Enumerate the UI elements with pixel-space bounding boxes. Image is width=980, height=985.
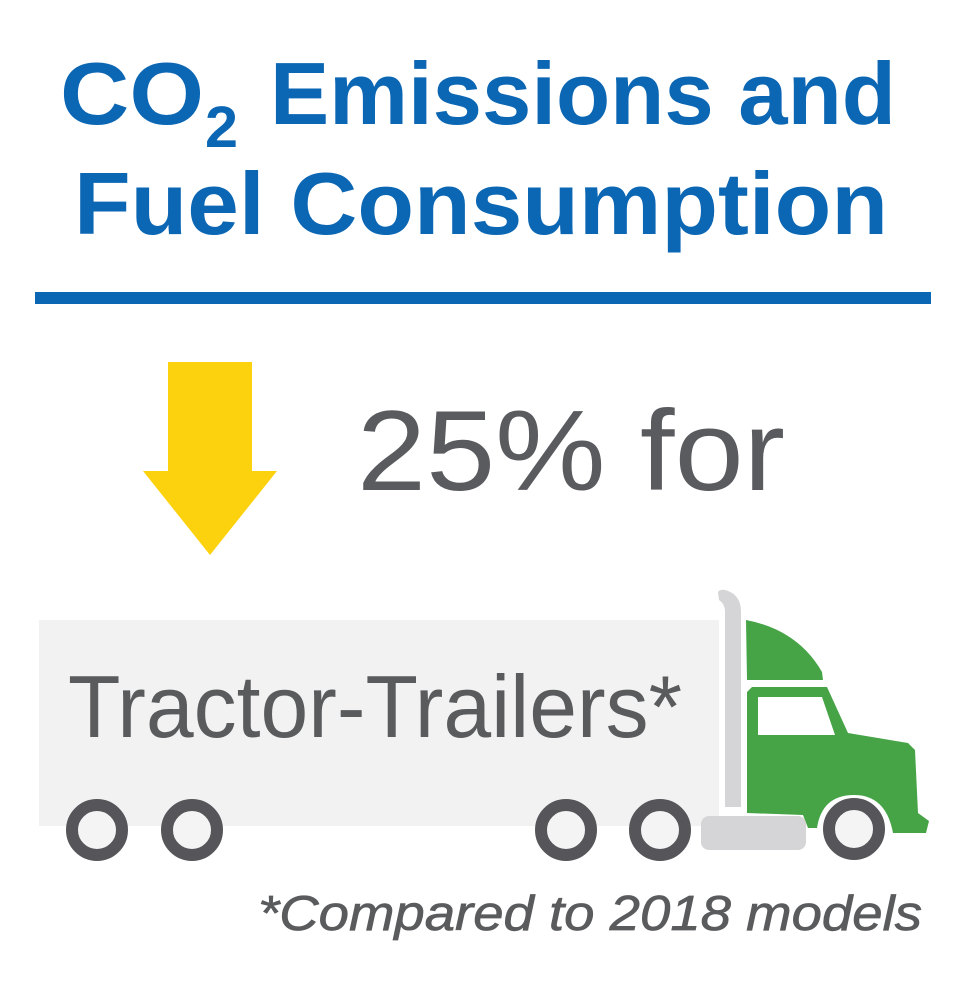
title: Fuel Consumption <box>74 154 888 253</box>
icon: tractor-trailer truck <box>39 590 929 855</box>
exhaust stack <box>718 590 741 807</box>
title divider <box>35 292 931 304</box>
cab <box>746 620 929 833</box>
title: Emissions and <box>270 44 896 143</box>
trailer label: Tractor-Trailers* <box>68 657 682 756</box>
title: CO <box>60 44 204 143</box>
icon: down arrow <box>143 362 277 555</box>
footnote: *Compared to 2018 models <box>258 887 922 941</box>
reduction figure: 25% for <box>357 388 785 515</box>
trailer body <box>39 620 719 826</box>
title <box>60 44 896 253</box>
fuel tank <box>701 816 806 850</box>
wheels <box>72 804 879 855</box>
title: 2 <box>205 95 238 160</box>
